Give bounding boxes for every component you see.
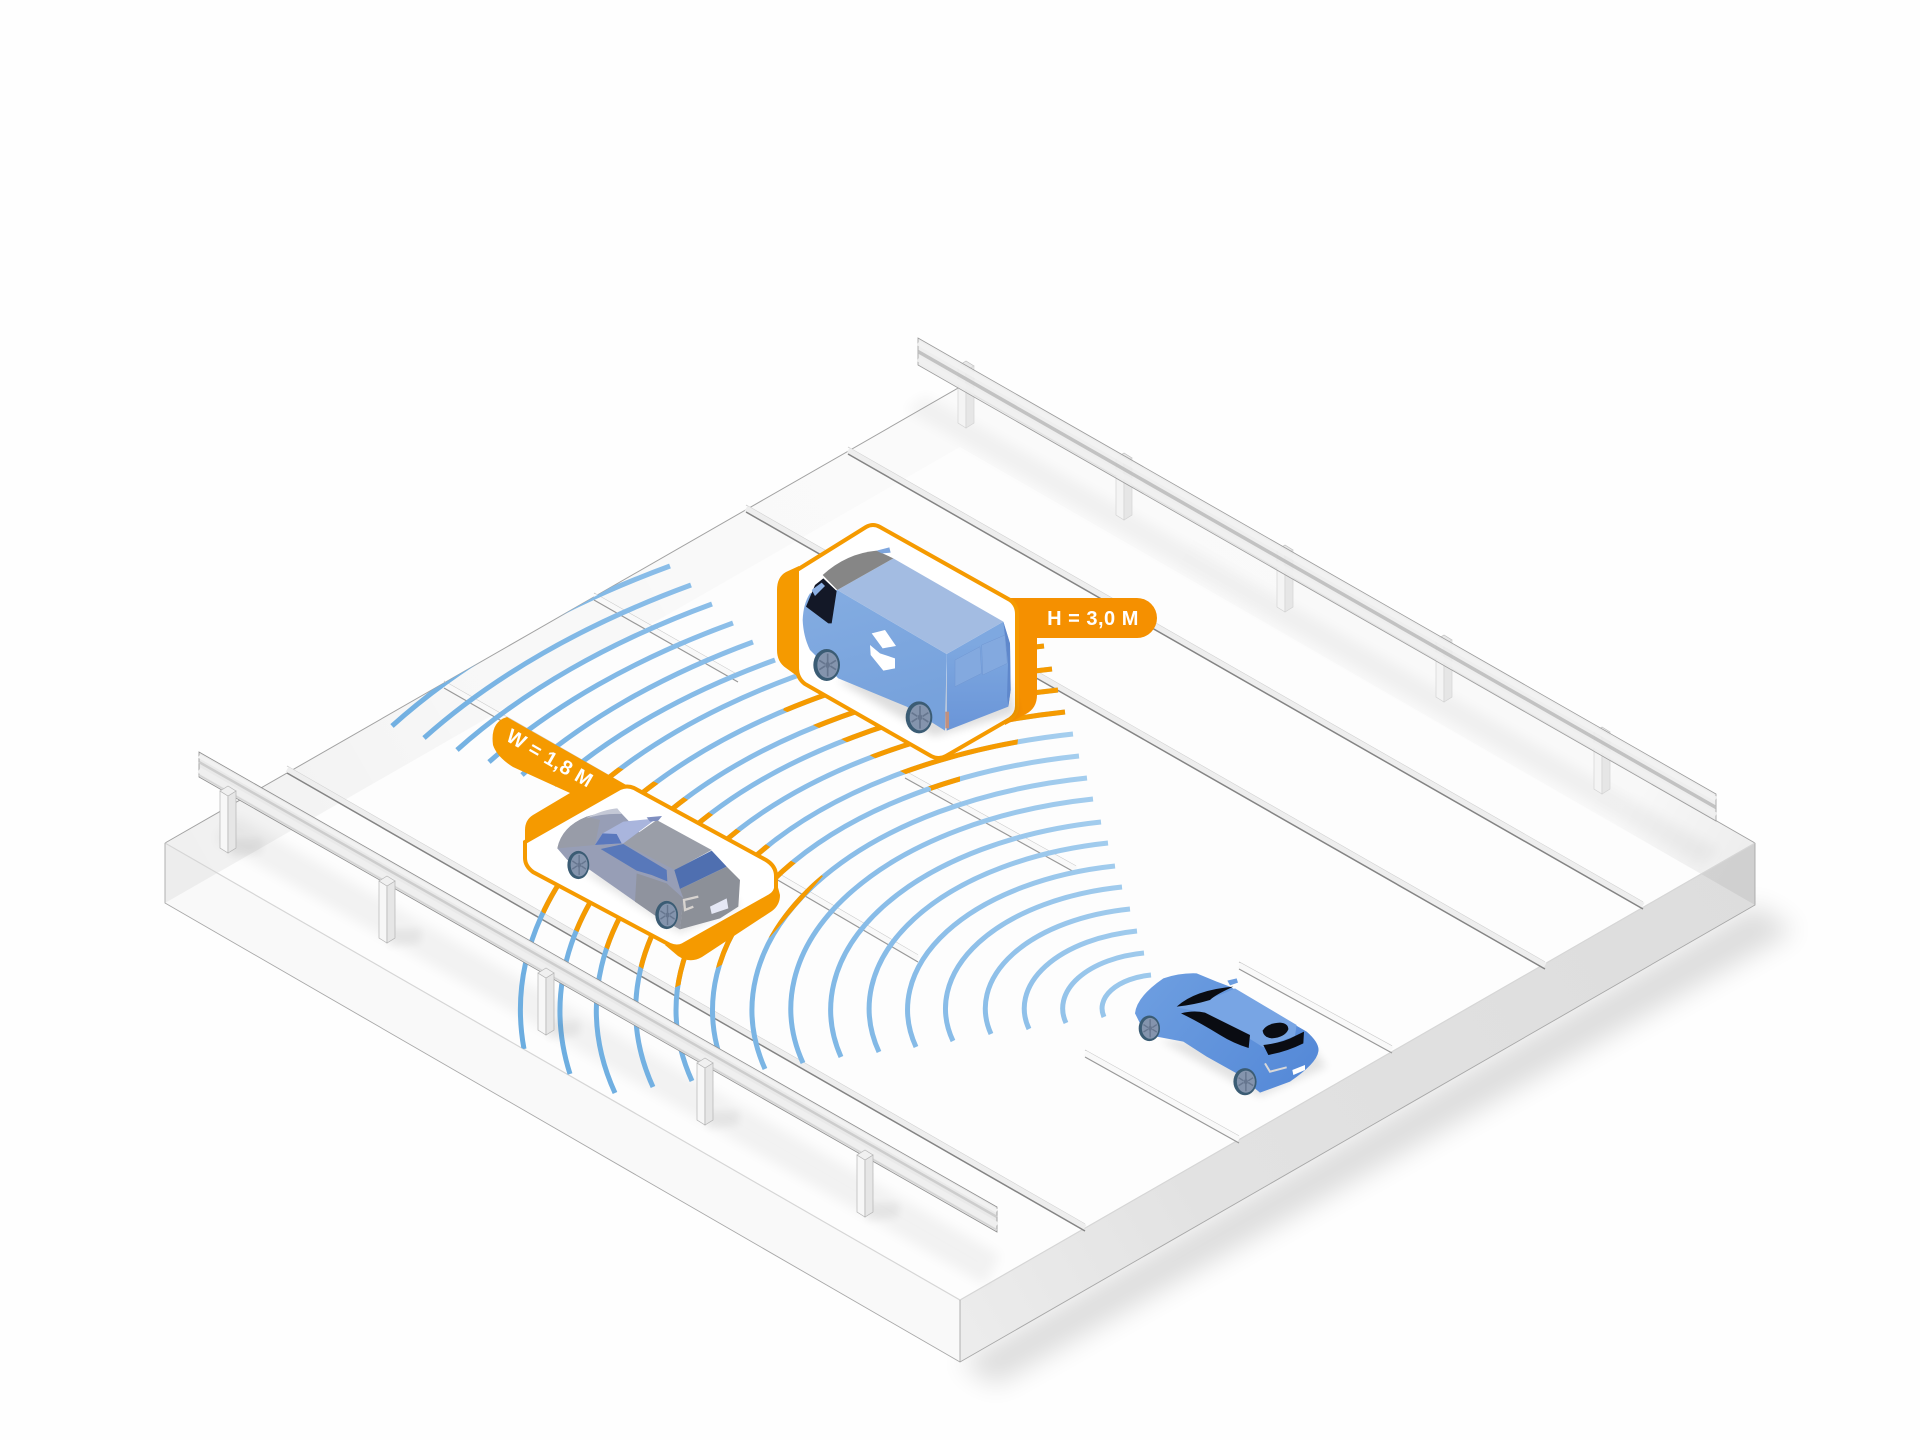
- radar wave arcs: [392, 566, 1151, 1093]
- van side: [803, 590, 947, 731]
- blue car roof: [1177, 988, 1297, 1047]
- van: [803, 547, 1017, 737]
- isometric road scene: [164, 337, 1790, 1388]
- solid lane line centre: [746, 505, 1545, 969]
- blue car shadow: [1160, 1040, 1327, 1097]
- front rail posts: [220, 786, 899, 1221]
- car hexagon: [525, 786, 776, 946]
- back guard rail: [918, 338, 1716, 821]
- van rear dark edge: [1003, 622, 1011, 707]
- label W = 1,8 M: W = 1,8 M: [502, 725, 597, 792]
- grey car roof: [623, 820, 712, 870]
- lane lines: [287, 447, 1643, 1231]
- car label band: [493, 717, 628, 845]
- grey car windscreen: [595, 818, 657, 845]
- van left thick edge: [777, 566, 808, 684]
- blue sensor car: [1135, 973, 1327, 1097]
- front rail beam: [199, 752, 997, 1232]
- slab outlines: [165, 387, 1755, 843]
- van mirror arm: [877, 547, 891, 553]
- grey car rear: [680, 867, 740, 929]
- blue car side window: [1181, 1011, 1250, 1048]
- blue car sensor: [1263, 1023, 1288, 1038]
- grey car wheels: [567, 851, 678, 929]
- van highlight: [777, 525, 1157, 758]
- van mirror: [812, 583, 825, 596]
- van tail light: [945, 712, 949, 728]
- van roof: [837, 558, 1003, 654]
- slab top surface: [165, 387, 1755, 1300]
- blue car wheels: [1139, 1016, 1257, 1095]
- back rail beam: [918, 338, 1716, 821]
- grey car plate: [710, 898, 728, 914]
- ground shadow: [960, 905, 1795, 1385]
- van hexagon: [797, 525, 1017, 758]
- van shadow: [837, 677, 1017, 737]
- van rear: [947, 622, 1011, 731]
- slab right side face: [960, 843, 1755, 1362]
- blue car windscreen: [1177, 987, 1233, 1007]
- blue car plate: [1292, 1065, 1305, 1075]
- road slab: [165, 387, 1755, 1362]
- dashed line E: [594, 593, 1392, 1053]
- slab left side face: [165, 843, 960, 1362]
- grey car body side: [557, 808, 683, 929]
- van rear windows: [955, 635, 1007, 687]
- front guard rail: [199, 752, 997, 1232]
- solid lane line left: [287, 766, 1085, 1231]
- grey car bonnet: [557, 817, 600, 848]
- blue car rear window: [1263, 1032, 1304, 1055]
- van logo: [870, 630, 896, 671]
- grey car side window: [601, 844, 667, 881]
- van orange tab and label shape: [1000, 598, 1157, 725]
- guard rail ground shadow, front: [215, 815, 1000, 1285]
- label H = 3,0 M: H = 3,0 M: [1047, 608, 1139, 630]
- guard rail ground shadow, back: [905, 395, 1720, 865]
- dashed line F: [444, 681, 1239, 1143]
- van windscreen cap: [823, 551, 893, 590]
- solid lane line right: [848, 447, 1643, 909]
- car lower thick edge: [665, 880, 780, 960]
- grey car spoiler: [647, 816, 662, 822]
- grey car rear window: [674, 851, 727, 889]
- back right face seen through: [960, 387, 1755, 905]
- grey car shadow: [580, 870, 740, 933]
- blue car tail light: [1265, 1063, 1287, 1072]
- grey car: [557, 808, 740, 933]
- grey car tail light: [684, 897, 698, 910]
- back left face seen through: [165, 387, 960, 903]
- back rail posts: [958, 361, 1610, 794]
- blue car mirror: [1227, 978, 1238, 985]
- van window: [806, 578, 837, 623]
- van wheels: [813, 649, 932, 733]
- grey car door panel: [635, 873, 683, 929]
- grey car bonnet highlight: [586, 808, 622, 818]
- car highlight: [493, 717, 780, 960]
- blue car body: [1135, 973, 1319, 1093]
